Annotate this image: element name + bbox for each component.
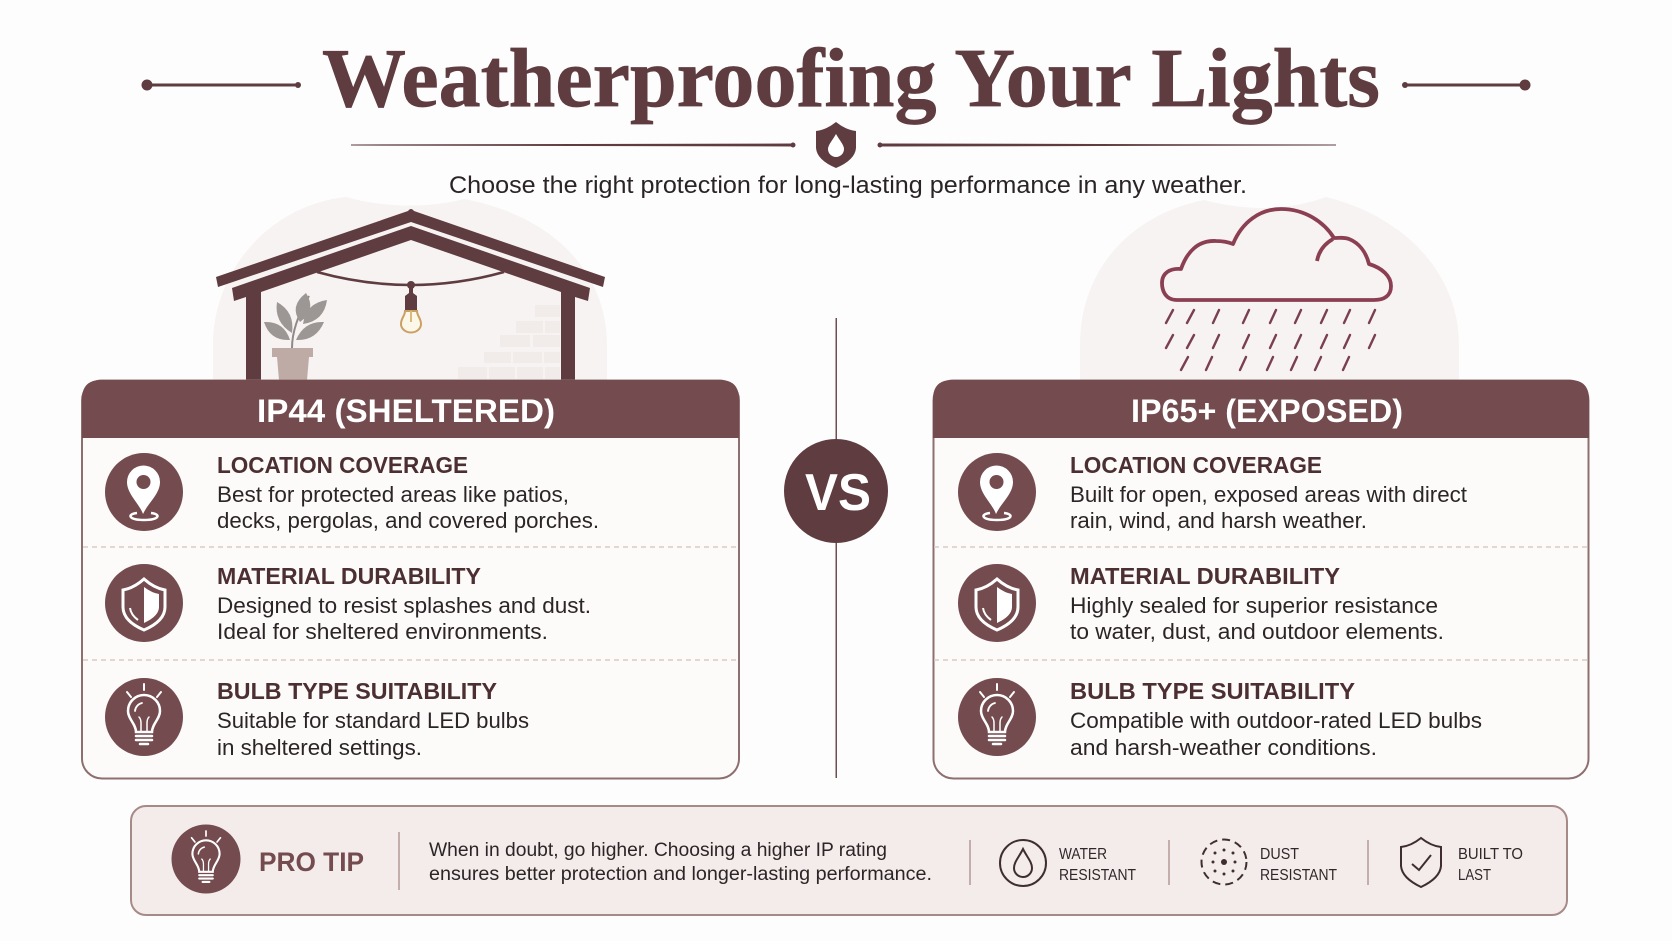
label: RESISTANT xyxy=(1260,867,1337,884)
title underline: left xyxy=(351,142,796,148)
panel header: IP44 (SHELTERED) xyxy=(257,393,555,429)
panel body xyxy=(934,380,1588,778)
icon: light bulb xyxy=(958,678,1036,756)
VS badge: VS xyxy=(805,464,871,522)
center divider line xyxy=(836,318,837,778)
text: bulb type suitability xyxy=(217,678,529,760)
text: material durability xyxy=(1070,563,1444,644)
label: DUST xyxy=(1260,846,1299,863)
bar background xyxy=(131,806,1567,915)
label xyxy=(1260,846,1337,884)
text: bulb type suitability: Compatible with outdoor-rated LED bulbs xyxy=(1070,708,1482,733)
text: material durability: Highly sealed for superior resistance xyxy=(1070,593,1438,618)
backdrop blob: left xyxy=(213,197,607,380)
title ornament: right line xyxy=(1402,80,1530,90)
text: location coverage: Best for protected areas like patios, xyxy=(217,482,569,507)
text: material durability xyxy=(217,563,591,644)
title: Weatherproofing Your Lights xyxy=(322,32,1380,125)
row: material durability xyxy=(105,563,591,644)
string wire xyxy=(317,272,504,285)
icon: shield xyxy=(958,564,1036,642)
label: WATER xyxy=(1059,846,1107,863)
icon: shield with water drop xyxy=(816,122,856,168)
brick wall xyxy=(458,305,560,379)
text: bulb type suitability: BULB TYPE SUITABILITY xyxy=(1070,678,1355,704)
text: location coverage: rain, wind, and harsh weather. xyxy=(1070,508,1367,533)
panel: IP65+ exposed xyxy=(933,380,1589,778)
label xyxy=(1059,846,1136,884)
panel header: IP65+ (EXPOSED) xyxy=(1131,393,1403,429)
label: BUILT TO xyxy=(1458,846,1523,863)
panel header xyxy=(82,380,739,438)
icon: light bulb xyxy=(105,678,183,756)
text: bulb type suitability: in sheltered settings. xyxy=(217,735,422,760)
pro tip text: When in doubt, go higher. Choosing a higher IP rating xyxy=(429,840,887,861)
panel body xyxy=(82,380,739,778)
text: material durability: MATERIAL DURABILITY xyxy=(1070,563,1340,589)
text: bulb type suitability: BULB TYPE SUITABILITY xyxy=(217,678,497,704)
potted plant xyxy=(264,293,327,380)
illustration: rain cloud xyxy=(1162,209,1391,370)
panel header xyxy=(933,380,1589,438)
pro tip label: PRO TIP xyxy=(259,847,364,877)
row: location coverage xyxy=(958,452,1467,533)
pro tip text xyxy=(429,840,932,885)
text: location coverage: Built for open, exposed areas with direct xyxy=(1070,482,1467,507)
icon: shield xyxy=(105,564,183,642)
text: location coverage xyxy=(1070,452,1467,533)
hanging bulb xyxy=(401,281,421,333)
text: location coverage xyxy=(217,452,599,533)
text: material durability: Designed to resist splashes and dust. xyxy=(217,593,591,618)
badge: built to last xyxy=(1401,838,1523,887)
icon: dust particles xyxy=(1202,840,1246,884)
badge: dust resistant xyxy=(1202,840,1337,884)
text: bulb type suitability: Suitable for standard LED bulbs xyxy=(217,708,529,733)
row: bulb type suitability xyxy=(105,678,529,760)
icon: location pin xyxy=(105,453,183,531)
icon: water drop xyxy=(1000,840,1046,886)
text: location coverage: decks, pergolas, and covered porches. xyxy=(217,508,599,533)
text: location coverage: LOCATION COVERAGE xyxy=(217,452,468,478)
cloud xyxy=(1162,209,1391,300)
illustration: sheltered porch xyxy=(216,209,605,380)
row: bulb type suitability xyxy=(958,678,1482,760)
label: RESISTANT xyxy=(1059,867,1136,884)
title ornament: left line xyxy=(142,80,301,90)
text: bulb type suitability: and harsh-weather conditions. xyxy=(1070,735,1377,760)
label xyxy=(1458,846,1523,884)
badge: water resistant xyxy=(1000,840,1136,886)
text: material durability: to water, dust, and outdoor elements. xyxy=(1070,619,1444,644)
label: LAST xyxy=(1458,867,1491,884)
title underline: right xyxy=(878,142,1336,148)
text: material durability: Ideal for sheltered environments. xyxy=(217,619,548,644)
pro tip text: ensures better protection and longer-lasting performance. xyxy=(429,864,932,885)
icon: location pin xyxy=(958,453,1036,531)
subtitle: Choose the right protection for long-lasting performance in any weather. xyxy=(449,172,1247,199)
text: bulb type suitability xyxy=(1070,678,1482,760)
row: location coverage xyxy=(105,452,599,533)
roof and posts xyxy=(216,209,605,380)
VS badge xyxy=(784,439,888,543)
text: location coverage: LOCATION COVERAGE xyxy=(1070,452,1322,478)
row: material durability xyxy=(958,563,1444,644)
icon: shield check xyxy=(1401,838,1441,887)
icon: pro tip bulb xyxy=(172,824,240,894)
rain xyxy=(1166,310,1375,370)
panel: pro tip bar xyxy=(131,806,1567,915)
text: material durability: MATERIAL DURABILITY xyxy=(217,563,481,589)
backdrop blob: right xyxy=(1080,197,1459,380)
panel: IP44 sheltered xyxy=(82,380,739,778)
